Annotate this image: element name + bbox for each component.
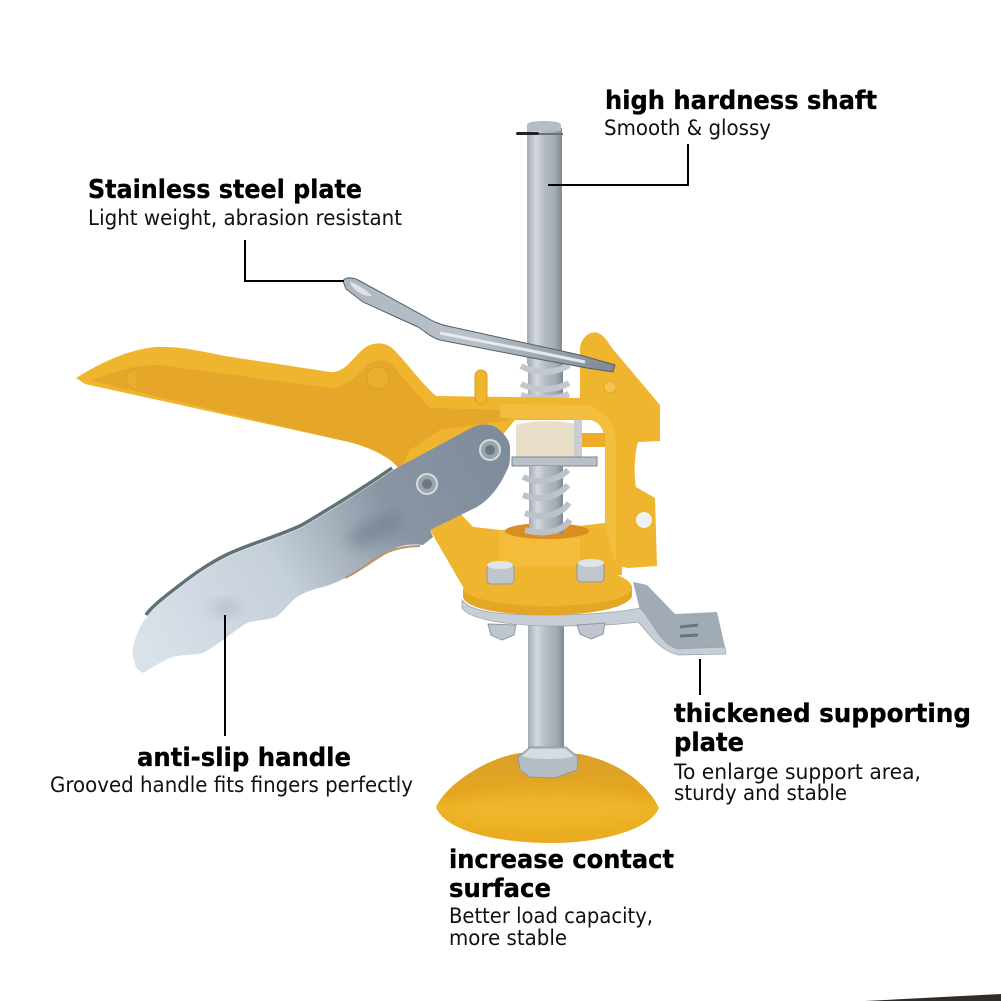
callout: stainless steel plate: Light weight, abrasion resistant	[88, 206, 402, 230]
main yellow body and handle	[76, 343, 622, 587]
leader line: shaft	[548, 144, 688, 185]
handle hollow shading	[92, 360, 510, 470]
felt bearing	[516, 420, 582, 458]
callout: thickened supporting plate: sturdy and stable	[674, 781, 847, 805]
leader line: steel plate	[245, 240, 344, 281]
back plate of yellow body	[580, 332, 660, 568]
foot highlight	[455, 788, 645, 827]
back-edge of metal handle	[146, 468, 392, 615]
callout: increase contact surface: Better load capacity,	[449, 904, 653, 928]
callout: high hardness shaft: high hardness shaft	[605, 86, 877, 116]
callout: stainless steel plate: Stainless steel plate	[88, 175, 362, 205]
stainless steel lever plate	[343, 278, 615, 372]
shaft cap	[527, 121, 561, 131]
callout: anti-slip handle: anti-slip handle	[137, 743, 351, 773]
callout: thickened supporting plate: thickened supporting	[674, 699, 971, 729]
hex nut	[518, 747, 578, 778]
bolts under plate	[488, 623, 605, 640]
base disc	[463, 566, 632, 615]
callout: increase contact surface	[449, 845, 674, 950]
small nub on back plate	[604, 381, 616, 393]
base rim shading	[463, 590, 632, 615]
lower shaft	[528, 618, 564, 754]
shaft collar	[516, 132, 539, 135]
callout: increase contact surface: surface	[449, 874, 551, 904]
metal anti-slip handle	[132, 424, 510, 673]
yellow bar behind window	[580, 433, 605, 447]
callout: anti-slip handle: Grooved handle fits fingers perfectly	[50, 773, 413, 797]
rivets	[417, 440, 500, 494]
thickened supporting plate	[462, 582, 726, 655]
product: tile leveler tool	[76, 121, 726, 843]
callout: anti-slip handle	[50, 743, 413, 797]
callout: stainless steel plate	[88, 175, 402, 230]
callout: thickened supporting plate: plate	[674, 728, 744, 758]
small post	[475, 370, 487, 404]
handle blotches	[211, 506, 420, 614]
leader line: supporting plate	[699, 659, 701, 695]
support foot	[436, 753, 659, 843]
leader line: handle	[224, 615, 226, 736]
corner shadow wedge	[865, 994, 1001, 1001]
callout: high hardness shaft	[604, 86, 877, 140]
callout: high hardness shaft: Smooth & glossy	[604, 116, 771, 140]
callout: increase contact surface: increase contact	[449, 845, 674, 875]
boss with opening	[445, 510, 615, 585]
metal bracket plate	[512, 457, 597, 466]
handle pin circles	[126, 367, 389, 390]
frame window	[440, 420, 605, 530]
screws	[487, 559, 604, 584]
frame top highlight	[500, 404, 616, 560]
callout: thickened supporting plate	[673, 699, 971, 805]
top spring	[521, 360, 569, 399]
lower spring	[523, 466, 570, 534]
callout: thickened supporting plate: To enlarge support area,	[673, 760, 921, 784]
callout: increase contact surface: more stable	[449, 926, 567, 950]
hole in back plate	[636, 512, 652, 528]
upper shaft	[516, 121, 563, 364]
